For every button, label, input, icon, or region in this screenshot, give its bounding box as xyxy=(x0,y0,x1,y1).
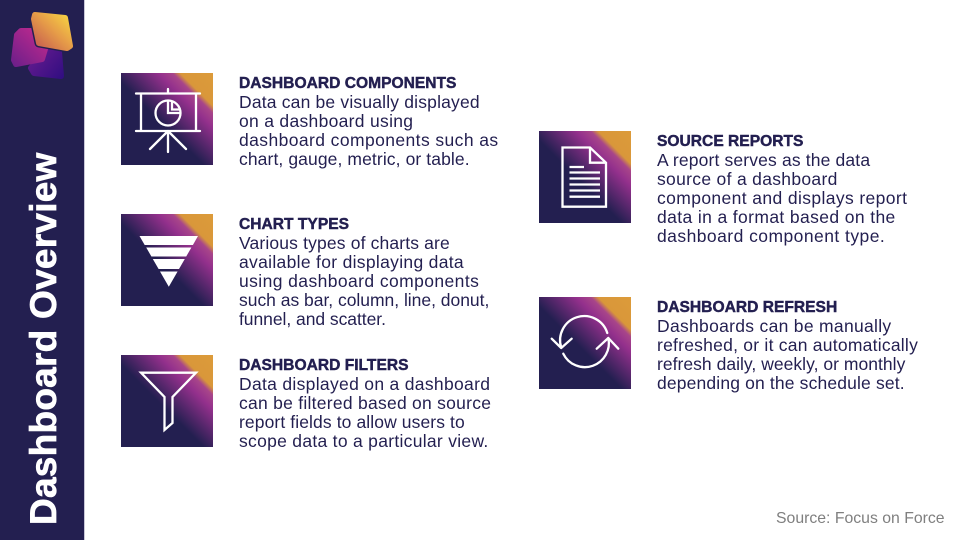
text: dashboard components: Data can be visually displayed xyxy=(239,92,480,112)
text: dashboard filters: Data displayed on a dashboard xyxy=(239,374,490,394)
icon: document xyxy=(539,131,631,223)
text: dashboard filters: DASHBOARD FILTERS xyxy=(239,357,409,374)
text: source reports xyxy=(657,133,907,246)
text: dashboard refresh: refreshed, or it can automatically xyxy=(657,335,918,355)
text: dashboard refresh: depending on the schedule set. xyxy=(657,373,905,393)
text: chart types: using dashboard components xyxy=(239,271,479,291)
text: dashboard filters: report fields to allow users to xyxy=(239,412,465,432)
text: dashboard filters: can be filtered based on source xyxy=(239,393,491,413)
logo xyxy=(11,12,73,79)
source credit: Source: Focus on Force xyxy=(776,510,945,527)
text: dashboard refresh: Dashboards can be manually xyxy=(657,316,891,336)
text: source reports: SOURCE REPORTS xyxy=(657,133,803,150)
text: source reports: source of a dashboard xyxy=(657,169,838,189)
sidebar xyxy=(0,0,85,540)
text: chart types: Various types of charts are xyxy=(239,233,450,253)
text: dashboard refresh xyxy=(657,299,918,393)
text: dashboard filters: scope data to a particular view. xyxy=(239,431,489,451)
text: source reports: data in a format based on the xyxy=(657,207,896,227)
text: dashboard components: DASHBOARD COMPONENTS xyxy=(239,75,456,92)
text: dashboard refresh: DASHBOARD REFRESH xyxy=(657,299,837,316)
text: dashboard components xyxy=(239,75,499,169)
text: source reports: dashboard component type. xyxy=(657,226,885,246)
icon: refresh xyxy=(539,297,631,389)
icon: presentation board xyxy=(121,73,213,165)
text: dashboard filters xyxy=(239,357,491,451)
text: chart types: such as bar, column, line, donut, xyxy=(239,290,489,310)
text: dashboard components: on a dashboard using xyxy=(239,111,413,131)
text: source reports: A report serves as the data xyxy=(657,150,870,170)
sidebar title: Dashboard Overview xyxy=(23,152,64,525)
text: dashboard refresh: refresh daily, weekly, or monthly xyxy=(657,354,905,374)
text: dashboard components: chart, gauge, metric, or table. xyxy=(239,149,470,169)
text: chart types: available for displaying data xyxy=(239,252,464,272)
text: source reports: component and displays report xyxy=(657,188,907,208)
icon: funnel chart xyxy=(121,214,213,306)
text: chart types: funnel, and scatter. xyxy=(239,309,386,329)
text: chart types xyxy=(239,216,489,329)
text: chart types: CHART TYPES xyxy=(239,216,349,233)
icon: filter xyxy=(121,355,213,447)
text: dashboard components: dashboard components such as xyxy=(239,130,499,150)
